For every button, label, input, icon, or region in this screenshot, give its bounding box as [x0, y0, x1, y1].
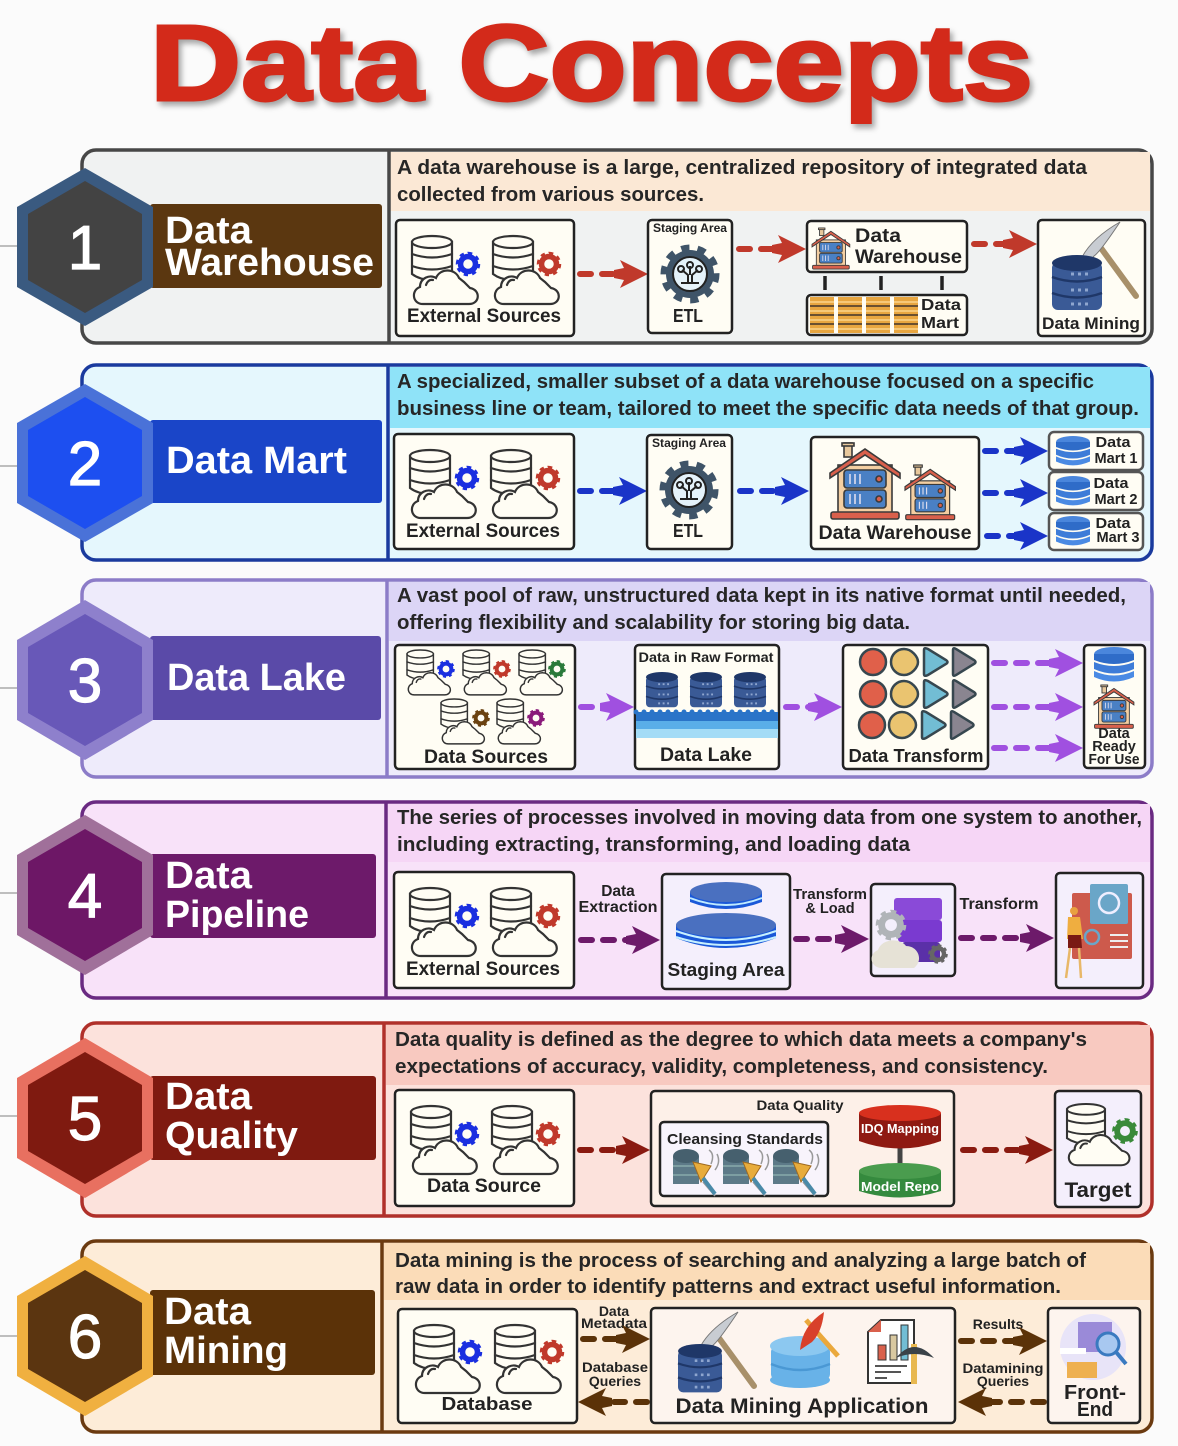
description: including extracting, transforming, and loading data: [397, 833, 911, 856]
arrow: [974, 230, 1037, 258]
data sources box: [395, 645, 575, 769]
icon: report with pickaxe: [868, 1320, 934, 1384]
results label and arrow: Results: [973, 1316, 1023, 1332]
queries label and arrow: [578, 1359, 648, 1416]
title: Data Concepts: [150, 2, 1033, 123]
heading: data mart: Data Mart: [166, 440, 347, 482]
number badge 6: 6: [68, 1303, 102, 1372]
data source box: Data Source: [427, 1176, 541, 1197]
datamining queries label and arrow: Queries: [977, 1373, 1029, 1389]
data ready box: [1084, 645, 1145, 768]
heading: data mart: [150, 420, 382, 503]
description: [397, 370, 1139, 420]
extraction label and arrow: Data: [601, 883, 635, 900]
heading: data warehouse: [150, 204, 382, 288]
data mart box: Data: [921, 297, 961, 314]
front-end box: [1048, 1308, 1140, 1423]
data warehouse box: Data: [855, 226, 901, 247]
heading: data warehouse: Data: [165, 210, 253, 252]
number badge 2: 2: [68, 430, 102, 499]
heading: data quality: Data: [165, 1076, 253, 1118]
data quality box: [651, 1091, 954, 1206]
heading: data pipeline: Pipeline: [165, 894, 309, 936]
ETL box: [647, 435, 732, 549]
arrow: [581, 693, 634, 721]
arrow: [786, 693, 842, 721]
cleansing standards: Cleansing Standards: [667, 1131, 823, 1148]
transform and load label and arrow: [793, 887, 869, 953]
description: A vast pool of raw, unstructured data kept in its native format until needed,: [397, 584, 1126, 607]
description: collected from various sources.: [397, 183, 704, 206]
datamining queries label and arrow: [958, 1360, 1044, 1416]
external sources box: [396, 220, 574, 336]
data ready box: Data: [1098, 726, 1131, 742]
external sources box: [394, 872, 574, 988]
description: [397, 806, 1142, 856]
IDQ mapping and model repo: IDQ Mapping: [861, 1121, 939, 1136]
number badge 1: 1: [68, 214, 102, 283]
arrow: [740, 477, 809, 505]
description: business line or team, tailored to meet the specific data needs of that group.: [397, 397, 1139, 420]
transform and load label and arrow: & Load: [805, 901, 855, 917]
arrow: [580, 477, 647, 505]
external sources box: [394, 434, 574, 549]
queries label and arrow: Database: [582, 1359, 648, 1375]
datamining queries label and arrow: Datamining: [962, 1360, 1044, 1376]
description: expectations of accuracy, validity, completeness, and consistency.: [395, 1055, 1048, 1078]
description: [397, 156, 1088, 206]
cleansing standards: [660, 1122, 828, 1196]
IDQ mapping and model repo: Model Repo: [861, 1179, 939, 1194]
description: A specialized, smaller subset of a data warehouse focused on a specific: [397, 370, 1094, 393]
heading: data warehouse: Warehouse: [165, 242, 374, 284]
data mining box: [1038, 220, 1145, 336]
arrows to ready data: [994, 649, 1083, 762]
ETL box: ETL: [673, 306, 703, 326]
data warehouse box: Data Warehouse: [818, 523, 972, 544]
description: raw data in order to identify patterns and extract useful information.: [395, 1275, 1061, 1298]
number badge 6: [17, 1256, 153, 1416]
staging area box: [662, 874, 790, 989]
arrows to marts: [985, 437, 1048, 550]
number badge 3: [17, 600, 153, 760]
database box: [398, 1309, 577, 1423]
data marts: Data: [1096, 434, 1131, 451]
data lake box: Data Lake: [660, 745, 752, 766]
number badge 5: [17, 1038, 153, 1198]
extraction label and arrow: [578, 883, 660, 954]
external sources box: External Sources: [407, 306, 561, 327]
processing box: [871, 884, 955, 976]
transform and load label and arrow: Transform: [793, 887, 867, 903]
data lake box: [635, 645, 779, 769]
heading: data quality: Quality: [165, 1115, 298, 1157]
data marts: Mart 3: [1096, 529, 1140, 546]
data quality box: Data Quality: [756, 1097, 844, 1113]
heading: data mining: Data: [164, 1291, 252, 1333]
heading: data mining: [150, 1290, 375, 1375]
heading: data lake: Data Lake: [167, 657, 346, 699]
panel: data quality: [17, 1023, 1152, 1216]
data marts: Mart 2: [1094, 491, 1138, 508]
transform label and arrow: Transform: [960, 896, 1038, 913]
transform label and arrow: [960, 896, 1054, 952]
queries label and arrow: Queries: [589, 1373, 641, 1389]
panel: data mart: [17, 365, 1152, 560]
description: [397, 584, 1126, 634]
data sources box: Data Sources: [424, 747, 548, 768]
arrow: [963, 1136, 1053, 1164]
front-end box: End: [1077, 1399, 1113, 1421]
data source box: [395, 1090, 574, 1206]
metadata label and arrow: Metadata: [581, 1315, 647, 1331]
metadata label and arrow: Data: [599, 1303, 629, 1319]
data marts: Mart 1: [1094, 450, 1138, 467]
target box: Target: [1064, 1179, 1132, 1202]
ETL box: Staging Area: [652, 436, 726, 450]
data mining application box: Data Mining Application: [676, 1394, 928, 1418]
data marts: Data: [1094, 475, 1129, 492]
data marts: [1049, 432, 1143, 550]
data mart box: Mart: [921, 315, 960, 332]
number badge 3: 3: [68, 647, 102, 716]
external sources box: External Sources: [406, 521, 560, 542]
IDQ mapping and model repo: [859, 1105, 941, 1198]
data mart box: [807, 295, 967, 335]
heading: data mining: Mining: [164, 1330, 288, 1372]
external sources box: External Sources: [406, 959, 560, 980]
data warehouse box: [811, 437, 979, 549]
description: offering flexibility and scalability for storing big data.: [397, 611, 910, 634]
data mining application box: [651, 1308, 955, 1423]
data warehouse box: [807, 221, 967, 272]
data mining box: Data Mining: [1042, 314, 1140, 333]
icon: light blue database: [770, 1312, 838, 1388]
number badge 5: 5: [68, 1085, 102, 1154]
heading: data pipeline: Data: [165, 855, 253, 897]
data marts: Data: [1096, 515, 1131, 532]
extraction label and arrow: Extraction: [578, 899, 658, 916]
heading: data quality: [150, 1076, 376, 1160]
panel: data mining: [17, 1241, 1152, 1432]
ETL box: [648, 220, 732, 333]
description: Data quality is defined as the degree to which data meets a company's: [395, 1028, 1087, 1051]
front-end box: Front-: [1064, 1382, 1126, 1404]
description: [395, 1028, 1087, 1078]
data ready box: Ready: [1092, 739, 1136, 755]
description: A data warehouse is a large, centralized repository of integrated data: [397, 156, 1088, 179]
analytics user box: [1056, 873, 1143, 988]
arrow: [739, 235, 806, 263]
data transform box: Data Transform: [848, 746, 984, 766]
panel: data lake: [17, 580, 1152, 777]
metadata label and arrow: [581, 1303, 650, 1353]
data transform box: [843, 645, 988, 769]
heading: data lake: [150, 636, 381, 720]
panel: data pipeline: [17, 802, 1152, 998]
data warehouse box: Warehouse: [855, 247, 962, 268]
data lake box: Data in Raw Format: [638, 650, 774, 665]
number badge 4: [17, 815, 153, 975]
ETL box: Staging Area: [653, 221, 727, 235]
database box: Database: [442, 1394, 532, 1414]
data ready box: For Use: [1088, 752, 1140, 768]
arrow: [580, 1136, 650, 1164]
results label and arrow: [961, 1316, 1047, 1355]
heading: data pipeline: [150, 854, 376, 938]
ETL box: ETL: [673, 521, 703, 541]
number badge 2: [17, 384, 153, 542]
number badge 1: [17, 168, 153, 326]
staging area box: Staging Area: [668, 959, 785, 980]
arrow: [580, 260, 648, 288]
description: The series of processes involved in moving data from one system to another,: [397, 806, 1142, 829]
description: Data mining is the process of searching and analyzing a large batch of: [395, 1249, 1086, 1272]
target box: [1055, 1091, 1141, 1207]
description: [395, 1249, 1086, 1298]
number badge 4: 4: [68, 862, 102, 931]
